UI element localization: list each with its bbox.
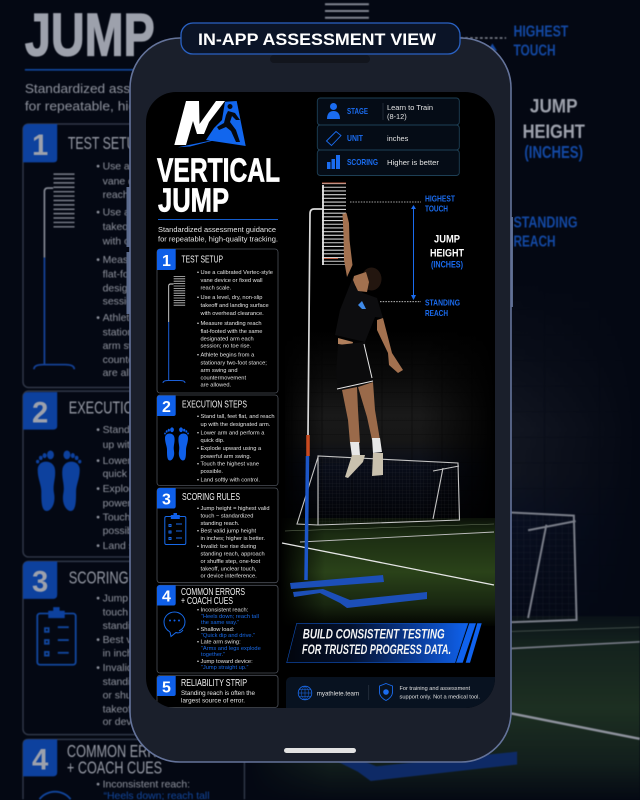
panel: scoring rules: or device interference. [200, 573, 257, 579]
panel: common errors and coach cues: Late arm swing: [200, 640, 241, 646]
footer strip: For training and assessment [400, 686, 470, 692]
panel: test setup: arm swing and [200, 368, 238, 374]
panel: test setup: 1 [162, 253, 171, 270]
logo [174, 101, 246, 147]
panel: execution steps: • [197, 431, 199, 437]
background: enlarged dimmed infographic: 3 [32, 566, 48, 599]
athlete [335, 213, 403, 478]
panel: execution steps: up with the designated arm. [200, 422, 271, 428]
panel: execution steps [157, 395, 278, 486]
background: enlarged dimmed infographic: Land softly with control. [103, 541, 212, 552]
panel: scoring rules: standing reach. [200, 521, 240, 527]
label: jump height [430, 234, 464, 271]
background: enlarged dimmed infographic: flat-footed with the same [103, 270, 216, 281]
label: jump height: (INCHES) [431, 260, 463, 271]
panel: execution steps: Land softly with control. [200, 477, 260, 483]
label: standing reach: STANDING [425, 298, 460, 308]
panel: common errors and coach cues: “Quick dip and drive.” [201, 633, 255, 639]
panel: execution steps: Touch the highest vane [200, 462, 259, 468]
panel: scoring rules: SCORING RULES [182, 492, 240, 503]
panel: common errors and coach cues [157, 585, 278, 673]
background: enlarged dimmed infographic: • [96, 425, 100, 436]
panel: test setup: Use a calibrated Vertec-style [200, 270, 273, 276]
info table: stage, unit, scoring [317, 98, 459, 176]
background: enlarged dimmed infographic: touch − standardized [103, 607, 200, 618]
panel: reliability strip: 5 [162, 680, 171, 696]
info table: stage, unit, scoring: (8-12) [387, 112, 407, 121]
panel: execution steps: • [197, 462, 199, 468]
panel: common errors and coach cues: Inconsistent reach: [200, 608, 249, 614]
view title pill [181, 23, 460, 54]
panel: test setup: • [197, 353, 199, 359]
background: enlarged dimmed infographic: standing reach. [103, 621, 174, 632]
panel: test setup: Use a level, dry, non-slip [200, 295, 262, 301]
panel: common errors and coach cues: + COACH CUES [181, 596, 233, 607]
subtitle: for repeatable, high-quality tracking. [158, 235, 278, 244]
panel: test setup: are allowed. [200, 383, 232, 389]
background: enlarged dimmed infographic: TOUCH [513, 43, 556, 60]
background: enlarged dimmed infographic: • [96, 162, 100, 173]
background: enlarged dimmed infographic: takeoff, unclear touch, [103, 704, 205, 715]
panel: test setup: session; no toe rise. [200, 344, 252, 350]
vertec device [290, 183, 427, 608]
panel: test setup: with overhead clearance. [200, 311, 264, 317]
panel: common errors and coach cues: “Jump straight up.” [201, 665, 249, 671]
label: jump height: JUMP [434, 234, 460, 246]
panel: test setup: • [197, 295, 199, 301]
background: enlarged dimmed infographic: JUMP [530, 95, 578, 117]
background: enlarged dimmed infographic: • [96, 313, 100, 324]
info table: stage, unit, scoring: Higher is better [387, 158, 440, 167]
panel: test setup: • [197, 321, 199, 327]
photo: gym wall and field [282, 365, 495, 622]
info table: stage, unit, scoring: SCORING [347, 157, 378, 167]
footer strip [286, 677, 495, 708]
background: enlarged dimmed infographic: or shuffle step, one-foot [103, 691, 212, 702]
label: highest touch: HIGHEST [425, 193, 456, 203]
background: enlarged dimmed infographic: quick dip. [103, 469, 147, 480]
panel: execution steps: 2 [162, 399, 171, 416]
background: enlarged dimmed infographic: • [96, 541, 100, 552]
panel: reliability strip: Standing reach is often the [181, 690, 255, 697]
panel: scoring rules [157, 488, 278, 583]
background: enlarged dimmed infographic: standing reach, approach [103, 677, 220, 688]
background: enlarged dimmed infographic: JUMP [25, 1, 155, 69]
subtitle: Standardized assessment guidance [158, 225, 276, 234]
panel: scoring rules: touch − standardized [200, 514, 253, 520]
background: enlarged dimmed infographic: • [96, 635, 100, 646]
panel: execution steps: • [197, 477, 199, 483]
background: enlarged dimmed infographic: are allowed. [103, 368, 159, 379]
panel: common errors and coach cues: Shallow load: [200, 627, 235, 633]
panel: execution steps: • [197, 414, 199, 420]
panel: test setup [157, 249, 278, 393]
panel: test setup: Athlete begins from a [200, 353, 255, 359]
background: enlarged dimmed infographic: • [96, 207, 100, 218]
background: enlarged dimmed infographic: • [96, 484, 100, 495]
info table: stage, unit, scoring: UNIT [347, 133, 364, 143]
panel: scoring rules: standing reach, approach [200, 552, 265, 558]
panel: common errors and coach cues: COMMON ERRORS [181, 587, 245, 598]
background: enlarged dimmed infographic: Athlete begins from a [103, 313, 201, 324]
panel: common errors and coach cues: • [197, 659, 199, 665]
panel: test setup: stationary two-foot stance; [200, 360, 267, 366]
subtitle [158, 219, 278, 244]
panel: test setup: flat-footed with the same [200, 329, 262, 335]
background: enlarged dimmed infographic: designated arm each [103, 283, 200, 294]
label: highest touch: TOUCH [425, 204, 448, 214]
background: enlarged dimmed infographic: + COACH CUES [67, 758, 162, 778]
panel: scoring rules: 3 [162, 492, 171, 508]
panel: test setup: countermovement [200, 376, 246, 382]
background: enlarged dimmed infographic: (INCHES) [524, 142, 583, 162]
panel: common errors and coach cues: together.” [201, 652, 225, 658]
phone screen [146, 92, 501, 717]
panel: execution steps: • [197, 446, 199, 452]
background: enlarged dimmed infographic: STANDING [513, 215, 577, 232]
background: enlarged dimmed infographic: stationary two-foot stance; [103, 327, 224, 338]
background: enlarged dimmed infographic: or device interference. [103, 717, 206, 728]
label: standing reach: REACH [425, 308, 448, 318]
side buttons [126, 187, 513, 314]
background: enlarged dimmed infographic: • [96, 594, 100, 605]
info table: stage, unit, scoring: inches [387, 134, 409, 143]
panel: reliability strip [157, 675, 278, 708]
title [156, 158, 280, 212]
background: enlarged dimmed infographic: SCORING RULES [69, 567, 175, 587]
phone notch [270, 55, 370, 63]
panel: execution steps: quick dip. [200, 438, 225, 444]
background: enlarged dimmed infographic: • [96, 456, 100, 467]
background: enlarged dimmed infographic: takeoff and landing surface [103, 222, 228, 233]
info table: stage, unit, scoring: STAGE [347, 106, 368, 116]
background: enlarged dimmed infographic: Use a level, dry, non-slip [103, 207, 216, 218]
background: enlarged dimmed infographic: countermovement [103, 355, 186, 366]
footer strip: myathlete.team [317, 691, 359, 698]
panel: execution steps: EXECUTION STEPS [182, 399, 247, 410]
banner: BUILD CONSISTENT TESTING [303, 626, 445, 641]
background: enlarged dimmed infographic: session; no toe rise. [103, 297, 195, 308]
panel: common errors and coach cues: • [197, 640, 199, 646]
panel: execution steps: Stand tall, feet flat, and reach [200, 414, 274, 420]
panel: test setup: TEST SETUP [182, 255, 223, 266]
background: enlarged dimmed infographic: HEIGHT [523, 121, 585, 143]
background: enlarged dimmed infographic: Best valid jump height [103, 635, 205, 646]
background: enlarged dimmed infographic: possible. [103, 526, 144, 537]
background: enlarged dimmed infographic: Measure standing reach [103, 255, 215, 266]
panel: scoring rules: • [197, 544, 199, 550]
background: enlarged dimmed infographic: • [96, 513, 100, 524]
panel: common errors and coach cues: “Heels down; reach tall [201, 614, 259, 620]
panel: scoring rules: takeoff, unclear touch, [200, 566, 257, 572]
measurement markers [350, 202, 421, 302]
banner: FOR TRUSTED PROGRESS DATA. [302, 642, 451, 657]
background: enlarged dimmed infographic: reach scale. [103, 190, 159, 201]
background: enlarged dimmed infographic: Use a calibrated Vertec-style [103, 162, 235, 173]
label: jump height: HEIGHT [430, 248, 464, 260]
panel: scoring rules: or shuffle step, one-foot [200, 559, 261, 565]
panel: execution steps: powerful arm swing. [200, 454, 251, 460]
panel: scoring rules: Invalid: toe rise during [200, 544, 256, 550]
panel: scoring rules: in inches; higher is better. [200, 536, 265, 542]
background: enlarged dimmed infographic: HIGHEST [513, 24, 569, 41]
panel: reliability strip: RELIABILITY STRIP [181, 678, 247, 689]
background: enlarged dimmed infographic: 1 [32, 129, 48, 162]
panel: scoring rules: Jump height = highest valid [200, 506, 270, 512]
background: enlarged dimmed infographic: vane device or fixed wall [103, 176, 216, 187]
background: enlarged dimmed infographic: • [96, 780, 100, 791]
panel: execution steps: possible. [200, 469, 223, 475]
panel: scoring rules: • [197, 529, 199, 535]
soccer goal [297, 456, 460, 525]
panel: test setup: • [197, 270, 199, 276]
label: standing reach [425, 300, 460, 316]
background: enlarged dimmed infographic: 2 [32, 396, 48, 429]
info table: stage, unit, scoring: Learn to Train [387, 103, 433, 112]
view title pill: IN-APP ASSESSMENT VIEW [198, 30, 437, 49]
panel: execution steps: Explode upward using a [200, 446, 262, 452]
background: enlarged dimmed infographic: for repeatable, high-quality tracking. [25, 99, 244, 114]
background: enlarged dimmed infographic: TEST SETUP [68, 133, 144, 153]
background: enlarged dimmed infographic: Jump height = highest valid [103, 594, 229, 605]
panel: test setup: vane device or fixed wall [200, 278, 262, 284]
background: enlarged dimmed infographic: arm swing and [103, 341, 171, 352]
panel: common errors and coach cues: • [197, 608, 199, 614]
background: enlarged dimmed infographic: up with the designated arm. [103, 440, 231, 451]
panel: reliability strip: largest source of error. [181, 697, 245, 704]
panel: common errors and coach cues: 4 [162, 589, 171, 606]
panel: common errors and coach cues: • [197, 627, 199, 633]
footer strip: support only. Not a medical tool. [400, 695, 480, 701]
background: enlarged dimmed infographic: Stand tall, feet flat, and reach [103, 425, 238, 436]
panel: test setup: designated arm each [200, 336, 254, 342]
panel: scoring rules: • [197, 506, 199, 512]
title: VERTICAL [157, 152, 280, 189]
home indicator [284, 748, 356, 753]
background: enlarged dimmed infographic: REACH [513, 234, 556, 251]
background: enlarged dimmed infographic: in inches; higher is better. [103, 648, 221, 659]
background: enlarged dimmed infographic: Explode upward using a [103, 484, 214, 495]
panel: scoring rules: Best valid jump height [200, 529, 257, 535]
background: enlarged dimmed infographic: • [96, 663, 100, 674]
label: highest touch [425, 196, 455, 212]
background: enlarged dimmed infographic: with overhead clearance. [102, 237, 218, 248]
background: enlarged dimmed infographic: powerful arm swing. [103, 498, 195, 509]
background: enlarged dimmed infographic: 4 [32, 743, 49, 776]
panel: common errors and coach cues: “Arms and legs explode [201, 646, 261, 652]
background: enlarged dimmed infographic: Inconsistent reach: [103, 780, 190, 791]
panel: common errors and coach cues: Jump toward device: [200, 659, 253, 665]
panel: test setup: reach scale. [200, 286, 232, 292]
panel: test setup: takeoff and landing surface [200, 303, 269, 309]
background: enlarged dimmed infographic: COMMON ERRORS [67, 741, 184, 761]
panel: execution steps: Lower arm and perform a [200, 431, 265, 437]
background: enlarged dimmed infographic: Lower arm and perform a [103, 456, 220, 467]
background: enlarged dimmed infographic: EXECUTION STEPS [69, 398, 188, 418]
background: enlarged dimmed infographic: • [96, 255, 100, 266]
title: JUMP [158, 182, 229, 219]
background: enlarged dimmed infographic: Invalid: toe rise during [103, 663, 205, 674]
phone body [130, 38, 511, 762]
panel: common errors and coach cues: the same way.” [201, 620, 239, 626]
background: enlarged dimmed infographic: Standardized assessment guidance [25, 81, 241, 96]
panel: test setup: Measure standing reach [200, 321, 262, 327]
banner [287, 623, 482, 663]
background: enlarged dimmed infographic: Touch the highest vane [103, 513, 210, 524]
